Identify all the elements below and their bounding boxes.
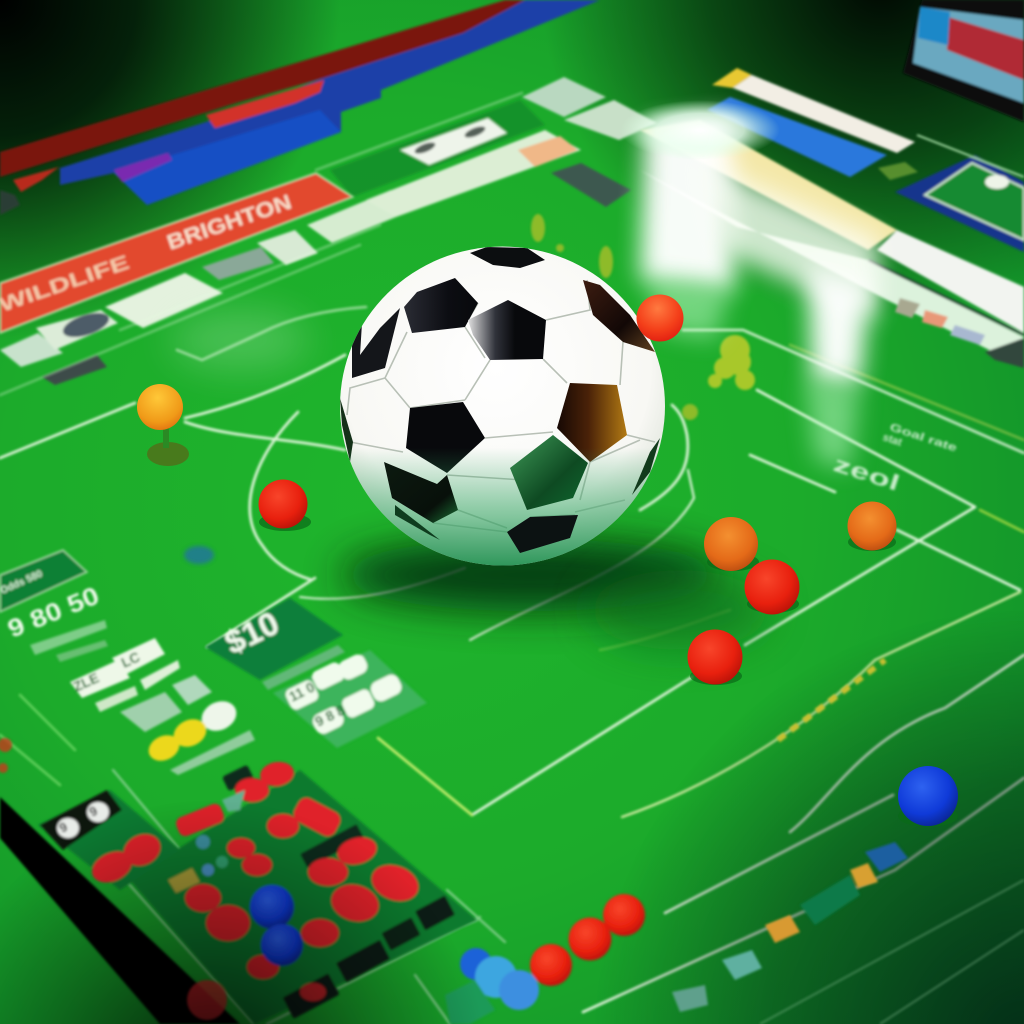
top patch bbox=[470, 247, 545, 268]
green-yellow cluster marker bbox=[708, 335, 755, 390]
game pieces bbox=[137, 294, 958, 827]
monitor top right bbox=[903, 0, 1024, 122]
small blue smudge bbox=[184, 546, 214, 564]
white odds cells bbox=[70, 660, 130, 698]
value grid bbox=[273, 650, 427, 748]
dark table edge bottom left bbox=[0, 797, 240, 1024]
yellow markers bbox=[169, 714, 211, 752]
red tab bbox=[206, 80, 324, 128]
red corner tab bbox=[13, 167, 59, 192]
field text labels bbox=[830, 421, 958, 496]
odds panel left: ZLE bbox=[71, 669, 101, 695]
bottom right vignette bbox=[0, 600, 1024, 1024]
odds value: 9 80 50 bbox=[4, 582, 103, 644]
light strip bbox=[640, 170, 1024, 367]
main panel bbox=[130, 770, 477, 1024]
top centre white cells bbox=[330, 77, 657, 207]
stake amount: $10 bbox=[219, 604, 285, 661]
lower right chips bbox=[672, 842, 1024, 1024]
red piece centre bbox=[744, 560, 800, 614]
yellow dotted marker line bbox=[778, 660, 885, 740]
red banner bbox=[0, 173, 353, 333]
orange piece right bbox=[848, 502, 896, 551]
tint over lower ball bbox=[348, 452, 658, 566]
blue data block bbox=[114, 110, 341, 205]
upper right patch bbox=[583, 280, 655, 352]
field text labels: zeol bbox=[830, 451, 903, 496]
odds panel left: Odds 580 bbox=[0, 568, 45, 597]
lower centre chips bbox=[445, 894, 645, 1024]
odds panel left bbox=[0, 550, 255, 775]
odds panel centre bbox=[205, 598, 427, 748]
odds panel left: LC bbox=[119, 649, 142, 671]
white marker bbox=[197, 696, 241, 736]
odds panel centre: 9 8 8 bbox=[312, 702, 347, 730]
left patch bbox=[352, 308, 400, 378]
blue board bbox=[60, 0, 600, 205]
seams bbox=[347, 280, 655, 532]
brown patch bbox=[557, 383, 627, 462]
bottom patch bbox=[507, 515, 578, 553]
white board bbox=[877, 230, 1024, 333]
ball shadow bbox=[340, 539, 770, 650]
light beams bbox=[170, 100, 880, 470]
upper left patch bbox=[404, 278, 478, 333]
red piece lower bbox=[688, 630, 742, 685]
roulette style panel bbox=[38, 759, 477, 1024]
blue piece bbox=[898, 766, 958, 827]
bottom left vignette bbox=[0, 780, 1024, 1024]
odds panel centre: 11 0 bbox=[286, 679, 317, 705]
small panel bbox=[38, 790, 180, 890]
banner text right: BRIGHTON bbox=[164, 191, 295, 255]
amber piece bbox=[137, 384, 189, 466]
blue bar bbox=[707, 97, 887, 177]
centre top patch bbox=[468, 300, 546, 360]
black score tag bbox=[40, 790, 122, 850]
red piece top bbox=[636, 294, 684, 342]
football bbox=[340, 246, 665, 566]
purple tab bbox=[114, 153, 172, 182]
cream bar bbox=[640, 120, 897, 250]
roulette style panel: 9 bbox=[87, 803, 100, 820]
yellow tab bbox=[712, 68, 752, 88]
top corner vignettes bbox=[0, 0, 1024, 400]
right mini pitch bbox=[895, 155, 1024, 252]
white bar bbox=[733, 75, 915, 153]
dark cells bbox=[222, 765, 455, 1019]
centre patch bbox=[406, 402, 485, 473]
red rail bbox=[0, 0, 525, 177]
stake panel bbox=[205, 598, 343, 680]
small dots bbox=[168, 790, 245, 893]
right boards bbox=[640, 68, 1024, 368]
red betting chips bbox=[87, 759, 423, 1020]
orange piece bbox=[704, 517, 759, 571]
upper left panels: rail and blue board bbox=[0, 0, 600, 215]
odds header bbox=[0, 550, 87, 612]
small red markers left edge bbox=[0, 738, 12, 773]
field text labels: stat bbox=[881, 431, 904, 449]
roulette style panel: 9 bbox=[57, 819, 70, 836]
white strip under banner bbox=[0, 130, 581, 385]
red piece left bbox=[258, 480, 311, 531]
field text labels: Goal rate bbox=[888, 421, 958, 454]
right edge patch bbox=[632, 438, 660, 495]
left edge patch bbox=[340, 398, 353, 462]
yellow flecks near ball bbox=[531, 214, 698, 420]
dark corner tab bbox=[0, 190, 20, 215]
green patch bbox=[510, 435, 588, 510]
lower left patch bbox=[384, 462, 458, 523]
blue tokens bbox=[250, 885, 294, 929]
